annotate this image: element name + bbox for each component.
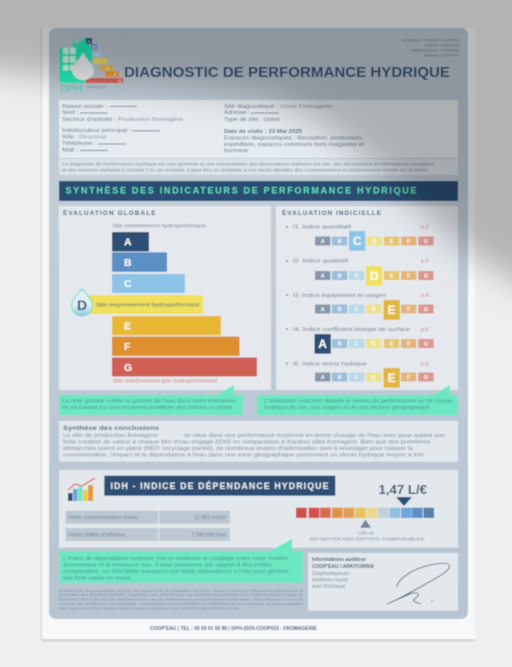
panel: diagnostic note: et des mesures réalisées à l'instant T le cas échéant. Il peut être un préalable à une étude détaillée des consommations et performances menée sur la durée. <box>62 167 429 172</box>
row I3: E <box>388 303 396 317</box>
row I4: I4. Indice coefficient biotope de surface <box>293 327 410 333</box>
site details: Site diagnostiqué : <box>224 104 279 110</box>
label: comparable average: 1,85 L/€ <box>357 531 374 536</box>
document reference meta: Valable jusqu'au : 19/04/2026 <box>411 48 460 52</box>
energy label bars: Site moyennement hydroperformant <box>96 302 200 308</box>
site details <box>224 104 365 154</box>
row I5: A <box>321 375 325 381</box>
footer: COOP'EAU | TEL : 05 59 01 50 80 | DPH-2025-COOP015 - FROMAGERIE <box>150 626 318 632</box>
heading banner: IDH - INDICE DE DÉPENDANCE HYDRIQUE <box>110 481 329 491</box>
row I2: I2. Indice qualitatif <box>293 259 349 265</box>
row I3: p.4 <box>421 293 428 299</box>
panel: conclusions: Synthèse des conclusions <box>63 425 160 432</box>
section banner <box>59 181 458 201</box>
logo: DPH: G <box>118 78 122 84</box>
callout: indicial evaluation: L'évaluation indicielle détaille le niveau de performance ou de risque <box>264 398 452 404</box>
site identity: Raison sociale : <box>62 104 107 110</box>
legal notice: protection des données (RGPD), Coop'Eau vous informe que vos données personnelles sont stockées dans la base de <box>59 593 303 597</box>
site identity: Production fromagère <box>118 117 183 123</box>
row I1: I1. Indice quantitatif <box>293 224 352 230</box>
logo: DPH: E <box>106 66 109 71</box>
row I5: C <box>355 375 359 381</box>
icon: water drop rating D <box>72 288 92 316</box>
row I2: D <box>370 269 379 283</box>
logo: DPH: A <box>88 39 91 44</box>
document reference meta: Etabli le : 31/05/2025 <box>425 44 460 48</box>
table: consumption and turnover <box>66 511 230 541</box>
energy label bars: B <box>124 257 132 269</box>
signature <box>387 563 450 604</box>
callout: IDH: comparables. Un IDH faible marquera une faible dépendance à l'eau pour générer <box>63 569 289 575</box>
row I2: G <box>424 274 428 280</box>
row I3: C <box>355 307 359 313</box>
row I1: A <box>321 239 325 245</box>
site details: bureaux <box>224 148 248 154</box>
row I3: I3. Indice équipement et usages <box>293 293 386 299</box>
logo: DPH: F <box>114 72 117 77</box>
table: consumption and turnover: Votre chiffre d'affaires <box>68 532 125 538</box>
logo: DPH: EXPERTISES <box>87 86 105 89</box>
row I3: B <box>338 307 342 313</box>
row I2: C <box>355 274 359 280</box>
row I4: B <box>338 342 342 348</box>
row I5: B <box>338 375 342 381</box>
site details: Date de visite : 23 Mai 2025 <box>224 129 302 135</box>
site identity: Rôle : <box>62 134 77 140</box>
callout: global evaluation <box>59 385 243 415</box>
row I4: p.5 <box>421 327 428 333</box>
logo: DPH: C <box>95 52 99 58</box>
panel: IDH <box>59 470 458 548</box>
heading banner <box>104 476 335 496</box>
site identity: Mail : <box>62 147 79 153</box>
arrow: comparable average marker <box>360 520 371 528</box>
panel: global evaluation <box>59 206 271 390</box>
arrow: site marker <box>396 497 412 506</box>
row I3: F <box>407 307 410 313</box>
energy label bars: G <box>124 362 132 374</box>
panel: diagnostic note: Le Diagnostic de Performance Hydrique est une synthèse et une interprétation des observations réalisées sur site, des déclarations et informations partagées <box>62 162 434 167</box>
row I1: p.2 <box>421 224 428 230</box>
title: DIAGNOSTIC DE PERFORMANCE HYDRIQUE <box>124 64 450 81</box>
panel: auditor information: Diagnostiqueurs : <box>312 571 352 577</box>
site identity: Directeur <box>79 134 107 140</box>
logo: DPH <box>59 37 123 95</box>
energy label bars: E <box>124 320 131 332</box>
row I2: A <box>321 274 325 280</box>
energy label bars: A <box>124 236 132 248</box>
row I1: E <box>390 239 394 245</box>
row I2: F <box>407 274 410 280</box>
panel: site information <box>59 100 458 158</box>
document reference meta: Méthode 2.8 DPH 08 <box>424 54 458 58</box>
label: comparable average <box>309 531 424 542</box>
row I2: E <box>390 274 394 280</box>
panel: conclusions: consommation, l'impact et la dépendance à l'eau dans une zone géographique présentant un stress hydrique moyen à fort. <box>63 452 425 458</box>
heading: ÉVALUATION INDICIELLE <box>282 208 382 217</box>
legal notice: faire valoir votre droit, veuillez nous contacter à l'adresse mail CONTACT@COOPEAU.COM. <box>59 606 240 610</box>
panel: auditor information: COOP'EAU / ARKITURRIA <box>312 564 374 570</box>
row I1: D <box>372 239 376 245</box>
panel: auditor information <box>308 553 458 611</box>
value: site IDH: 1,47 L/€ <box>378 482 427 497</box>
panel: auditor information: Informations auditeur <box>312 557 366 563</box>
row I5: F <box>407 375 410 381</box>
site details: Espaces diagnostiqués : Réception, production, <box>224 136 364 142</box>
site identity: Secteur d'activité : <box>62 117 117 123</box>
row I2 <box>286 259 434 286</box>
callout: indicial evaluation <box>257 385 458 415</box>
row I4: D <box>372 342 376 348</box>
callout: IDH: L'indice de dépendance hydrique met en évidence le couplage entre votre modèle <box>63 556 288 562</box>
section banner: SYNTHÈSE DES INDICATEURS DE PERFORMANCE HYDRIQUE <box>66 186 416 196</box>
panel: conclusions: Le site de production fromagère <box>63 433 158 439</box>
IDH colour scale <box>296 508 434 518</box>
legal notice: d'accès, de rectification, de portabilité, d'effacement ou une limitation du traitement de ces données. Si vous souhaitez <box>59 602 303 606</box>
table: consumption and turnover: 7 500 000 €/an <box>191 532 226 538</box>
icon: water drop rating D: D <box>77 297 87 313</box>
callout: IDH <box>59 539 303 583</box>
row I5: I5. Indice stress hydrique <box>293 361 367 367</box>
legal notice: données DPH à des fins de contrôles ou en cas de contestations ou de procédures judiciaires. Vous disposez d'un droit <box>59 598 304 602</box>
document page <box>41 28 475 642</box>
row I5: D <box>372 375 376 381</box>
row I1 <box>286 224 434 251</box>
row I1: B <box>338 239 342 245</box>
bottom caption: Site extrêmement peu hydroperformant <box>113 378 218 384</box>
top caption: Site extrêmement hydroperformant <box>112 224 206 230</box>
table: consumption and turnover: Votre consommation d'eau <box>68 515 138 521</box>
panel: auditor information: Matthieu Hasté <box>312 578 348 584</box>
document reference meta <box>402 38 460 58</box>
row I4: G <box>424 342 428 348</box>
site details: Type de site : Usine <box>224 117 280 123</box>
site identity: Siret : <box>62 110 79 116</box>
row I3: A <box>321 307 325 313</box>
site details: Adresse : <box>224 110 250 116</box>
energy label bars: F <box>124 341 131 353</box>
energy label bars: C <box>124 278 132 290</box>
callout: global evaluation: en se basant sur une moyenne pondérée des indices ci-contre. <box>62 405 234 411</box>
heading: ÉVALUATION GLOBALE <box>63 208 156 217</box>
row I1: G <box>424 239 428 245</box>
logo: DPH: DPH <box>60 84 82 95</box>
panel: indicial evaluation <box>276 206 458 390</box>
site details: expédition, espaces communs hors magasins et <box>224 142 365 148</box>
row I4 <box>286 327 434 354</box>
label: comparable average: IDH MOYEN DES ENTITES COMPARABLES <box>309 537 424 542</box>
site identity: Téléphone : <box>62 141 97 147</box>
row I3: G <box>424 307 428 313</box>
legal notice: À l'attention du propriétaire du bien au moment de la réalisation du DPH : Dans le cadre du Règlement général sur la <box>59 589 304 593</box>
row I4: F <box>407 342 410 348</box>
table: consumption and turnover: 11 003 m3/an <box>195 515 226 521</box>
site details: Usine Fromagerie <box>280 104 332 110</box>
logo: DPH: B <box>92 45 96 50</box>
panel: conclusions <box>59 421 458 462</box>
callout: global evaluation: La note globale reflète la gestion de l'eau dans votre entreprise <box>62 398 236 404</box>
panel: slate page background <box>49 28 468 619</box>
row I5 <box>286 361 434 388</box>
icon: growth chart <box>68 478 95 501</box>
row I3 <box>286 293 434 320</box>
panel: diagnostic note <box>59 159 458 175</box>
panel: auditor information: Axel Rochaud <box>312 584 345 590</box>
row I5: p.6 <box>421 361 428 367</box>
row I3: D <box>372 307 376 313</box>
row I5: E <box>388 371 396 385</box>
panel: conclusions: forte création de valeur à chaque litre d'eau engagé (IDH) en comparaison à d'autres sites fromagers. Bien que des premières <box>63 439 430 445</box>
document reference meta: N°UNIQUE : DPH-2025-COOP015 <box>402 38 460 42</box>
row I1: F <box>407 239 410 245</box>
energy label bars <box>88 232 257 376</box>
row I4: E <box>390 342 394 348</box>
site identity: Interlocuteur principal : <box>62 128 132 134</box>
row I4: A <box>318 337 327 351</box>
row I2: B <box>338 274 342 280</box>
callout: IDH: économique et la ressource eau. Il vous positionne par rapport à des entités <box>63 562 272 568</box>
row I1: C <box>353 234 362 248</box>
row I5: G <box>424 375 428 381</box>
row I2: p.3 <box>421 259 428 265</box>
site identity <box>62 104 183 153</box>
panel: conclusions: se situe dans une performance moyenne en terme d'usage de l'eau avec pour autant une <box>184 433 445 439</box>
panel: conclusions: démarches soient en place (NEP, recyclage partiel), de nombreux leviers d'optimisation sont à envisager pour baisser la <box>63 446 413 452</box>
callout: indicial evaluation: hydrique du site, ses usages et de son secteur géographique. <box>264 405 431 411</box>
callout: IDH: une forte valeur en euros. <box>63 576 132 582</box>
legal notice <box>59 589 304 610</box>
row I4: C <box>355 342 359 348</box>
